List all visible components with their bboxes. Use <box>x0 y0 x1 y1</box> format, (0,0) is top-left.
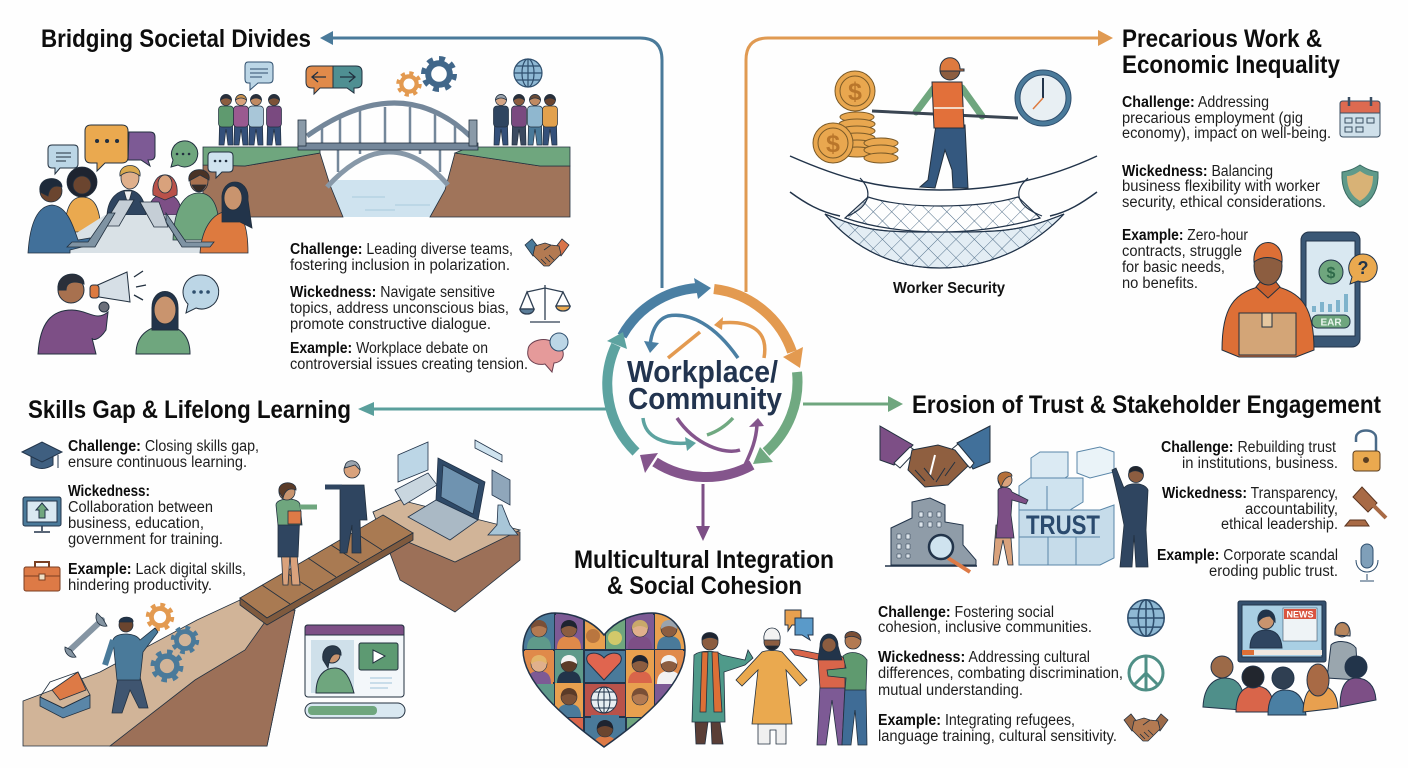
text: wickedness: government for training. <box>68 531 223 548</box>
illustration: trust blocks <box>1019 447 1114 565</box>
text: challenge: Challenge: Closing skills gap, <box>68 438 259 455</box>
ring arrow: blue <box>622 278 711 336</box>
text: example: for basic needs, <box>1122 259 1225 276</box>
icon: scales <box>520 285 570 322</box>
illustration: cliff and plank <box>23 500 520 746</box>
illustration: phone with earnings: $ <box>1327 265 1336 282</box>
illustration: phone with earnings <box>1301 232 1377 347</box>
text: challenge: Challenge: Leading diverse teams, <box>290 241 513 258</box>
illustration: safety net <box>790 156 1097 268</box>
arrow: to Bridging Societal Divides <box>320 31 662 288</box>
icon: open padlock <box>1353 430 1380 471</box>
text: challenge <box>878 604 1092 636</box>
icon group: meeting speech bubbles <box>48 125 233 178</box>
heading: Economic Inequality <box>1122 51 1340 79</box>
text: challenge <box>1161 439 1338 472</box>
ring arrow: purple <box>640 453 752 477</box>
text: wickedness: Collaboration between <box>68 499 213 516</box>
text: wickedness: promote constructive dialogue. <box>290 316 491 333</box>
icon: peace sign <box>1129 656 1163 690</box>
illustration: trust blocks: TRUST <box>1026 510 1100 540</box>
illustration: news screen with audience: NEWS <box>1286 610 1314 620</box>
text: example <box>1122 227 1248 292</box>
heading <box>574 546 834 600</box>
text: example: eroding public trust. <box>1209 563 1338 580</box>
text: challenge <box>68 438 259 471</box>
heading <box>1122 25 1340 79</box>
text: wickedness <box>1162 485 1338 533</box>
text: example: no benefits. <box>1122 275 1198 292</box>
illustration: phone with earnings: EAR <box>1320 318 1342 328</box>
ring arrow: teal <box>607 332 636 452</box>
text: wickedness: differences, combating discrimination, <box>878 665 1123 682</box>
icon: globe <box>514 59 542 87</box>
text: example: hindering productivity. <box>68 577 212 594</box>
inner arrow: blue <box>644 315 738 358</box>
heading: Skills Gap & Lifelong Learning <box>28 396 351 424</box>
heading: & Social Cohesion <box>607 572 802 600</box>
icon: language bubbles <box>785 610 813 640</box>
illustration: worker with gears and tools <box>40 605 197 718</box>
text: wickedness: topics, address unconscious bias, <box>290 300 509 317</box>
icon: gavel <box>1345 487 1386 526</box>
illustration: crumbling building with magnifier <box>885 498 977 572</box>
text: wickedness <box>68 483 223 548</box>
panel: Erosion of Trust & Stakeholder Engagement <box>880 391 1386 581</box>
text: wickedness: accountability, <box>1245 501 1338 518</box>
text: example: Example: Zero-hour <box>1122 227 1248 244</box>
people: left bank group <box>218 94 282 145</box>
text: wickedness: mutual understanding. <box>878 682 1023 699</box>
illustration: phone with earnings: ? <box>1358 258 1368 278</box>
text: challenge: precarious employment (gig <box>1122 110 1303 127</box>
illustration: coins: $ <box>848 78 862 106</box>
icon: brain with speech bubble <box>528 333 568 372</box>
icon: gears <box>398 58 455 95</box>
progress bar <box>305 703 405 718</box>
icon: chat bubble <box>245 62 273 90</box>
label: Worker Security: Worker Security <box>893 280 1005 297</box>
heading: Precarious Work & <box>1122 25 1322 53</box>
text: example <box>68 561 246 594</box>
text: example: Example: Workplace debate on <box>290 340 488 357</box>
text: challenge continued: fostering inclusion in polarization. <box>290 257 510 274</box>
illustration: coins <box>813 71 898 163</box>
illustration: delivery worker with box <box>1222 242 1314 357</box>
inner line: green <box>707 418 733 435</box>
central hub: Workplace/Community cycle <box>607 278 803 477</box>
icon: microphone <box>1356 544 1378 581</box>
ring arrow: green <box>753 372 798 464</box>
people: trust builders <box>993 466 1148 567</box>
icon: toolbox <box>24 562 60 591</box>
heading: Bridging Societal Divides <box>41 25 311 53</box>
text: challenge: cohesion, inclusive communities. <box>878 619 1092 636</box>
hub label <box>627 354 783 416</box>
text: example <box>1157 547 1338 580</box>
arrow: to Skills Gap <box>358 402 608 416</box>
arrow: to Multicultural Integration <box>696 484 710 541</box>
text: example <box>878 712 1117 745</box>
illustration: multicultural group <box>692 628 867 745</box>
text: wickedness: business flexibility with worker <box>1122 178 1320 195</box>
icon: exchange bubbles <box>306 66 362 94</box>
heading: Multicultural Integration <box>574 546 834 574</box>
text: example <box>290 340 528 373</box>
people: right bank group <box>494 94 558 145</box>
icon: graduation cap <box>22 442 62 468</box>
panel: Skills Gap & Lifelong Learning <box>22 396 520 746</box>
text: challenge: in institutions, business. <box>1182 455 1338 472</box>
illustration: mosaic heart of faces <box>523 613 685 749</box>
text: challenge: economy), impact on well-being. <box>1122 125 1331 142</box>
inner arrow: orange <box>668 317 765 358</box>
icon: world globe <box>1128 600 1164 636</box>
icon: handshake <box>525 239 569 266</box>
illustration: person with megaphone <box>38 271 146 354</box>
text: example: Example: Lack digital skills, <box>68 561 246 578</box>
inner arrow: purple <box>677 418 764 465</box>
text: example: Example: Integrating refugees, <box>878 712 1075 729</box>
text: example: controversial issues creating tension. <box>290 356 528 373</box>
text: wickedness: Wickedness: Navigate sensitive <box>290 284 495 301</box>
arrow: to Erosion of Trust <box>803 396 903 412</box>
illustration: tech platform with laptop <box>395 440 518 540</box>
illustration: news screen with audience <box>1203 601 1376 715</box>
panel: Bridging Societal Divides <box>28 25 570 373</box>
arrow: to Precarious Work <box>746 30 1113 292</box>
text: wickedness: ethical leadership. <box>1221 516 1338 533</box>
inner arrow: teal <box>643 418 696 451</box>
text: challenge <box>1122 94 1331 142</box>
icon: monitor with up arrow <box>23 497 61 532</box>
illustration: person listening <box>136 275 219 354</box>
panel: Precarious Work & Economic Inequality <box>790 25 1380 357</box>
illustration: tightrope worker <box>872 58 1018 188</box>
illustration: clock <box>1015 70 1071 126</box>
illustration: bridge over chasm <box>203 103 570 217</box>
text: challenge: ensure continuous learning. <box>68 454 247 471</box>
text: challenge: Challenge: Fostering social <box>878 604 1054 621</box>
panel: Multicultural Integration & Social Cohesion <box>523 546 1376 749</box>
text: wickedness: Wickedness: Transparency, <box>1162 485 1338 502</box>
text: wickedness: Wickedness: <box>68 483 150 500</box>
text: wickedness <box>1122 163 1326 211</box>
text: example: Example: Corporate scandal <box>1157 547 1338 564</box>
icon: handshake <box>1124 714 1168 741</box>
text: challenge: Challenge: Addressing <box>1122 94 1269 111</box>
text: example: language training, cultural sensitivity. <box>878 728 1117 745</box>
people: mentor and learner on plank <box>276 461 367 585</box>
hub label: Community <box>628 381 783 416</box>
text: wickedness <box>290 284 509 333</box>
ring arrow: orange <box>714 289 803 368</box>
icon: calendar <box>1340 97 1380 137</box>
illustration: video lesson window <box>305 625 404 697</box>
hub label: Workplace/ <box>627 354 778 389</box>
text: challenge: Challenge: Rebuilding trust <box>1161 439 1337 456</box>
illustration: breaking handshake <box>880 426 990 487</box>
text: wickedness: Wickedness: Balancing <box>1122 163 1273 180</box>
illustration: coins: $ <box>826 130 840 158</box>
illustration: diverse team meeting <box>28 166 252 253</box>
icon: shield <box>1342 165 1378 207</box>
text: wickedness <box>878 649 1123 699</box>
text: wickedness: Wickedness: Addressing cultural <box>878 649 1090 666</box>
text: wickedness: security, ethical considerations. <box>1122 194 1326 211</box>
text: example: contracts, struggle <box>1122 243 1242 260</box>
text: wickedness: business, education, <box>68 515 204 532</box>
